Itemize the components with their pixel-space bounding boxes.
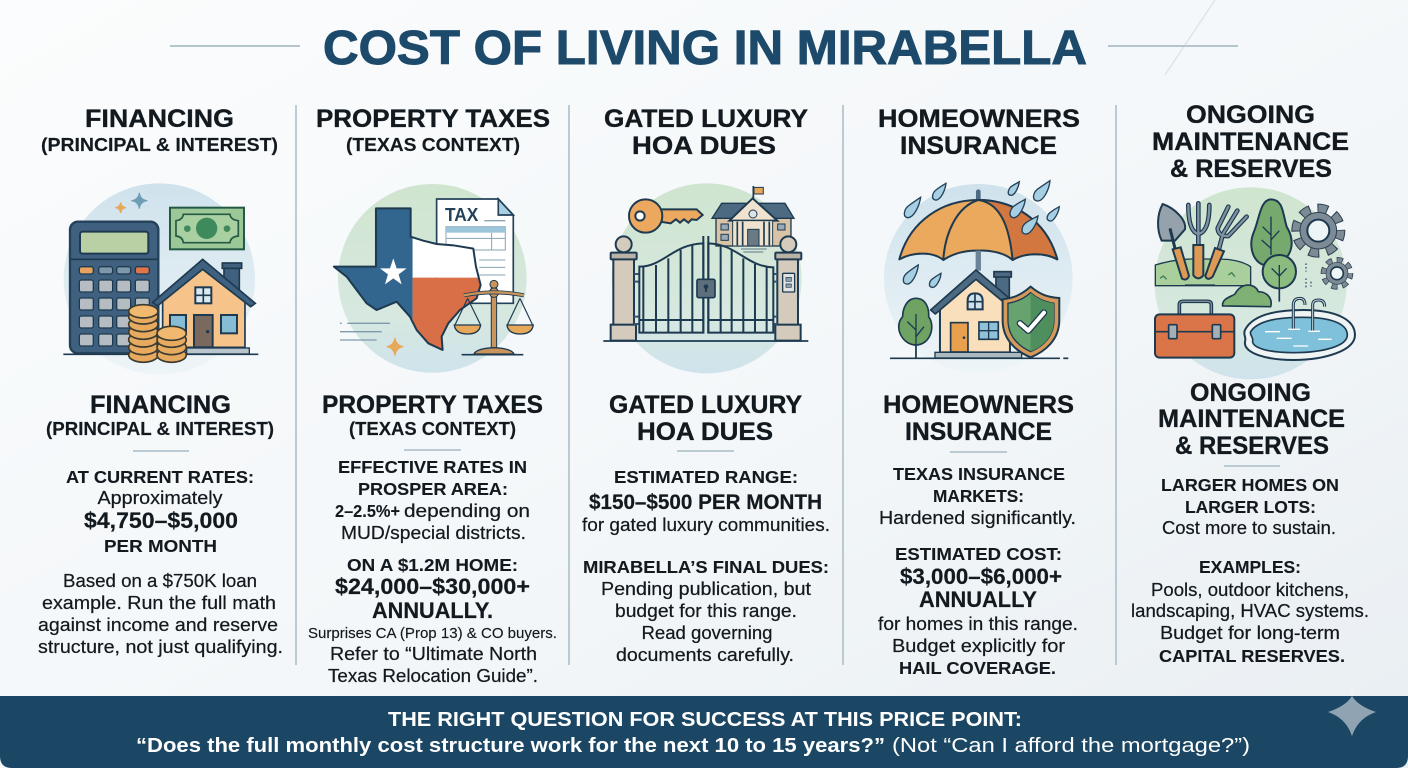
banner: the right question: (Not “Can I afford the mortgage?”) — [892, 735, 1250, 757]
subheading: financing: (PRINCIPAL & INTEREST) — [46, 419, 274, 439]
panel: property taxes — [308, 105, 557, 686]
text: property tax details: PROSPER AREA: — [358, 479, 508, 499]
text: maintenance details: landscaping, HVAC systems. — [1131, 601, 1369, 621]
text: HOA details: Pending publication, but — [601, 579, 811, 599]
icon: four-point star — [1328, 696, 1376, 736]
icon: gate, key and mansion — [603, 183, 808, 373]
subheading: HOA dues: HOA DUES — [637, 418, 773, 446]
subheading: financing — [46, 391, 274, 451]
text: HOA details: $150–$500 PER MONTH — [589, 491, 822, 514]
heading: maintenance and reserves: MAINTENANCE — [1152, 128, 1349, 156]
text: financing details: Approximately — [98, 488, 222, 508]
icon: calculator, house and coins — [63, 183, 258, 375]
text: property tax details: depending on — [404, 501, 530, 521]
panel: maintenance and reserves — [1131, 101, 1369, 666]
panel: homeowners insurance — [878, 105, 1080, 678]
subheading: homeowners insurance: HOMEOWNERS — [883, 391, 1074, 419]
text: insurance details: ESTIMATED COST: — [895, 544, 1062, 564]
text: financing details — [38, 467, 283, 657]
text: property tax details: ON A $1.2M HOME: — [347, 555, 518, 575]
text: HOA details: documents carefully. — [616, 645, 794, 665]
subheading: maintenance and reserves: & RESERVES — [1175, 432, 1329, 460]
heading: financing: FINANCING — [85, 105, 234, 133]
text: HOA details: Read governing — [642, 623, 772, 643]
text: insurance details: MARKETS: — [933, 486, 1024, 506]
text: property tax details: $24,000–$30,000+ — [335, 574, 530, 599]
text: financing details: PER MONTH — [104, 536, 217, 556]
text: insurance details: Budget explicitly for — [892, 636, 1065, 656]
text: financing details: $4,750–$5,000 — [84, 508, 238, 533]
text: property tax details: MUD/special districts. — [341, 523, 526, 543]
heading: HOA dues — [604, 105, 808, 160]
heading: homeowners insurance — [878, 105, 1080, 160]
subheading: maintenance and reserves — [1158, 379, 1345, 466]
heading: HOA dues: HOA DUES — [632, 132, 776, 160]
text: insurance details: $3,000–$6,000+ — [900, 564, 1062, 589]
subheading: property taxes: PROPERTY TAXES — [322, 391, 543, 419]
text: financing details: AT CURRENT RATES: — [66, 467, 254, 487]
text: property tax details: EFFECTIVE RATES IN — [338, 457, 527, 477]
title: COST OF LIVING IN MIRABELLA — [323, 22, 1087, 75]
subheading: homeowners insurance: INSURANCE — [905, 418, 1052, 446]
heading: property taxes: PROPERTY TAXES — [316, 105, 550, 133]
text: property tax details: Refer to “Ultimate North — [330, 644, 537, 664]
panel: financing — [38, 105, 283, 657]
subheading: maintenance and reserves: ONGOING — [1190, 379, 1311, 407]
icon: umbrella, house and shield — [884, 181, 1073, 373]
text: HOA details: MIRABELLA’S FINAL DUES: — [583, 557, 829, 577]
text: financing details: Based on a $750K loan — [63, 571, 257, 591]
text: HOA details: budget for this range. — [615, 601, 797, 621]
heading: homeowners insurance: INSURANCE — [900, 132, 1057, 160]
text: property tax details: 2–2.5%+ — [335, 501, 400, 521]
banner: the right question: “Does the full monthly cost structure work for the next 10 to 15 years?” — [136, 735, 885, 757]
text: maintenance details: Pools, outdoor kitchens, — [1151, 580, 1349, 600]
subheading: homeowners insurance — [883, 391, 1074, 452]
text: HOA details: ESTIMATED RANGE: — [614, 467, 798, 487]
text: insurance details: HAIL COVERAGE. — [899, 658, 1056, 678]
subheading: financing: FINANCING — [90, 391, 231, 419]
subheading: property taxes — [322, 391, 543, 450]
heading: property taxes: (TEXAS CONTEXT) — [346, 135, 520, 155]
text: maintenance details: LARGER HOMES ON — [1161, 475, 1339, 495]
text: insurance details: for homes in this range. — [878, 614, 1078, 634]
text: property tax details: ANNUALLY. — [372, 598, 493, 623]
icon: Texas map, tax form and scales — [330, 184, 533, 373]
subheading: HOA dues: GATED LUXURY — [609, 391, 802, 419]
text: insurance details: ANNUALLY — [919, 587, 1037, 612]
text: property tax details — [308, 457, 557, 686]
heading: HOA dues: GATED LUXURY — [604, 105, 808, 133]
text: insurance details — [878, 464, 1078, 678]
heading: maintenance and reserves: & RESERVES — [1170, 155, 1332, 183]
heading: property taxes — [316, 105, 550, 155]
text: HOA details: for gated luxury communities. — [582, 515, 830, 535]
heading: maintenance and reserves — [1152, 101, 1349, 183]
subheading: HOA dues — [609, 391, 802, 451]
text: maintenance details — [1131, 475, 1369, 666]
text: maintenance details: LARGER LOTS: — [1185, 497, 1316, 517]
text: financing details: against income and reserve — [38, 615, 278, 635]
text: insurance details: TEXAS INSURANCE — [893, 464, 1065, 484]
subheading: property taxes: (TEXAS CONTEXT) — [349, 419, 516, 439]
panel: HOA dues — [582, 105, 830, 665]
icon: tools, trees, gears, toolbox and pool — [1155, 187, 1355, 379]
icon: Texas map, tax form and scales: TAX — [445, 204, 479, 225]
heading: homeowners insurance: HOMEOWNERS — [878, 105, 1080, 133]
text: maintenance details: Cost more to sustain. — [1162, 518, 1336, 538]
heading: financing — [41, 105, 278, 155]
text: maintenance details: CAPITAL RESERVES. — [1159, 646, 1345, 666]
subheading: maintenance and reserves: MAINTENANCE — [1158, 405, 1345, 433]
heading: maintenance and reserves: ONGOING — [1186, 101, 1315, 129]
text: maintenance details: Budget for long-term — [1160, 623, 1340, 643]
text: HOA details — [582, 467, 830, 665]
text: financing details: structure, not just qualifying. — [38, 637, 283, 657]
text: financing details: example. Run the full math — [42, 593, 276, 613]
text: property tax details: Texas Relocation Guide”. — [328, 666, 538, 686]
banner: the right question: THE RIGHT QUESTION FOR SUCCESS AT THIS PRICE POINT: — [388, 709, 1022, 731]
text: maintenance details: EXAMPLES: — [1199, 557, 1301, 577]
text: insurance details: Hardened significantly. — [879, 508, 1076, 528]
banner: the right question — [0, 687, 1408, 768]
text: property tax details: Surprises CA (Prop 13) & CO buyers. — [308, 625, 557, 642]
heading: financing: (PRINCIPAL & INTEREST) — [41, 135, 278, 155]
